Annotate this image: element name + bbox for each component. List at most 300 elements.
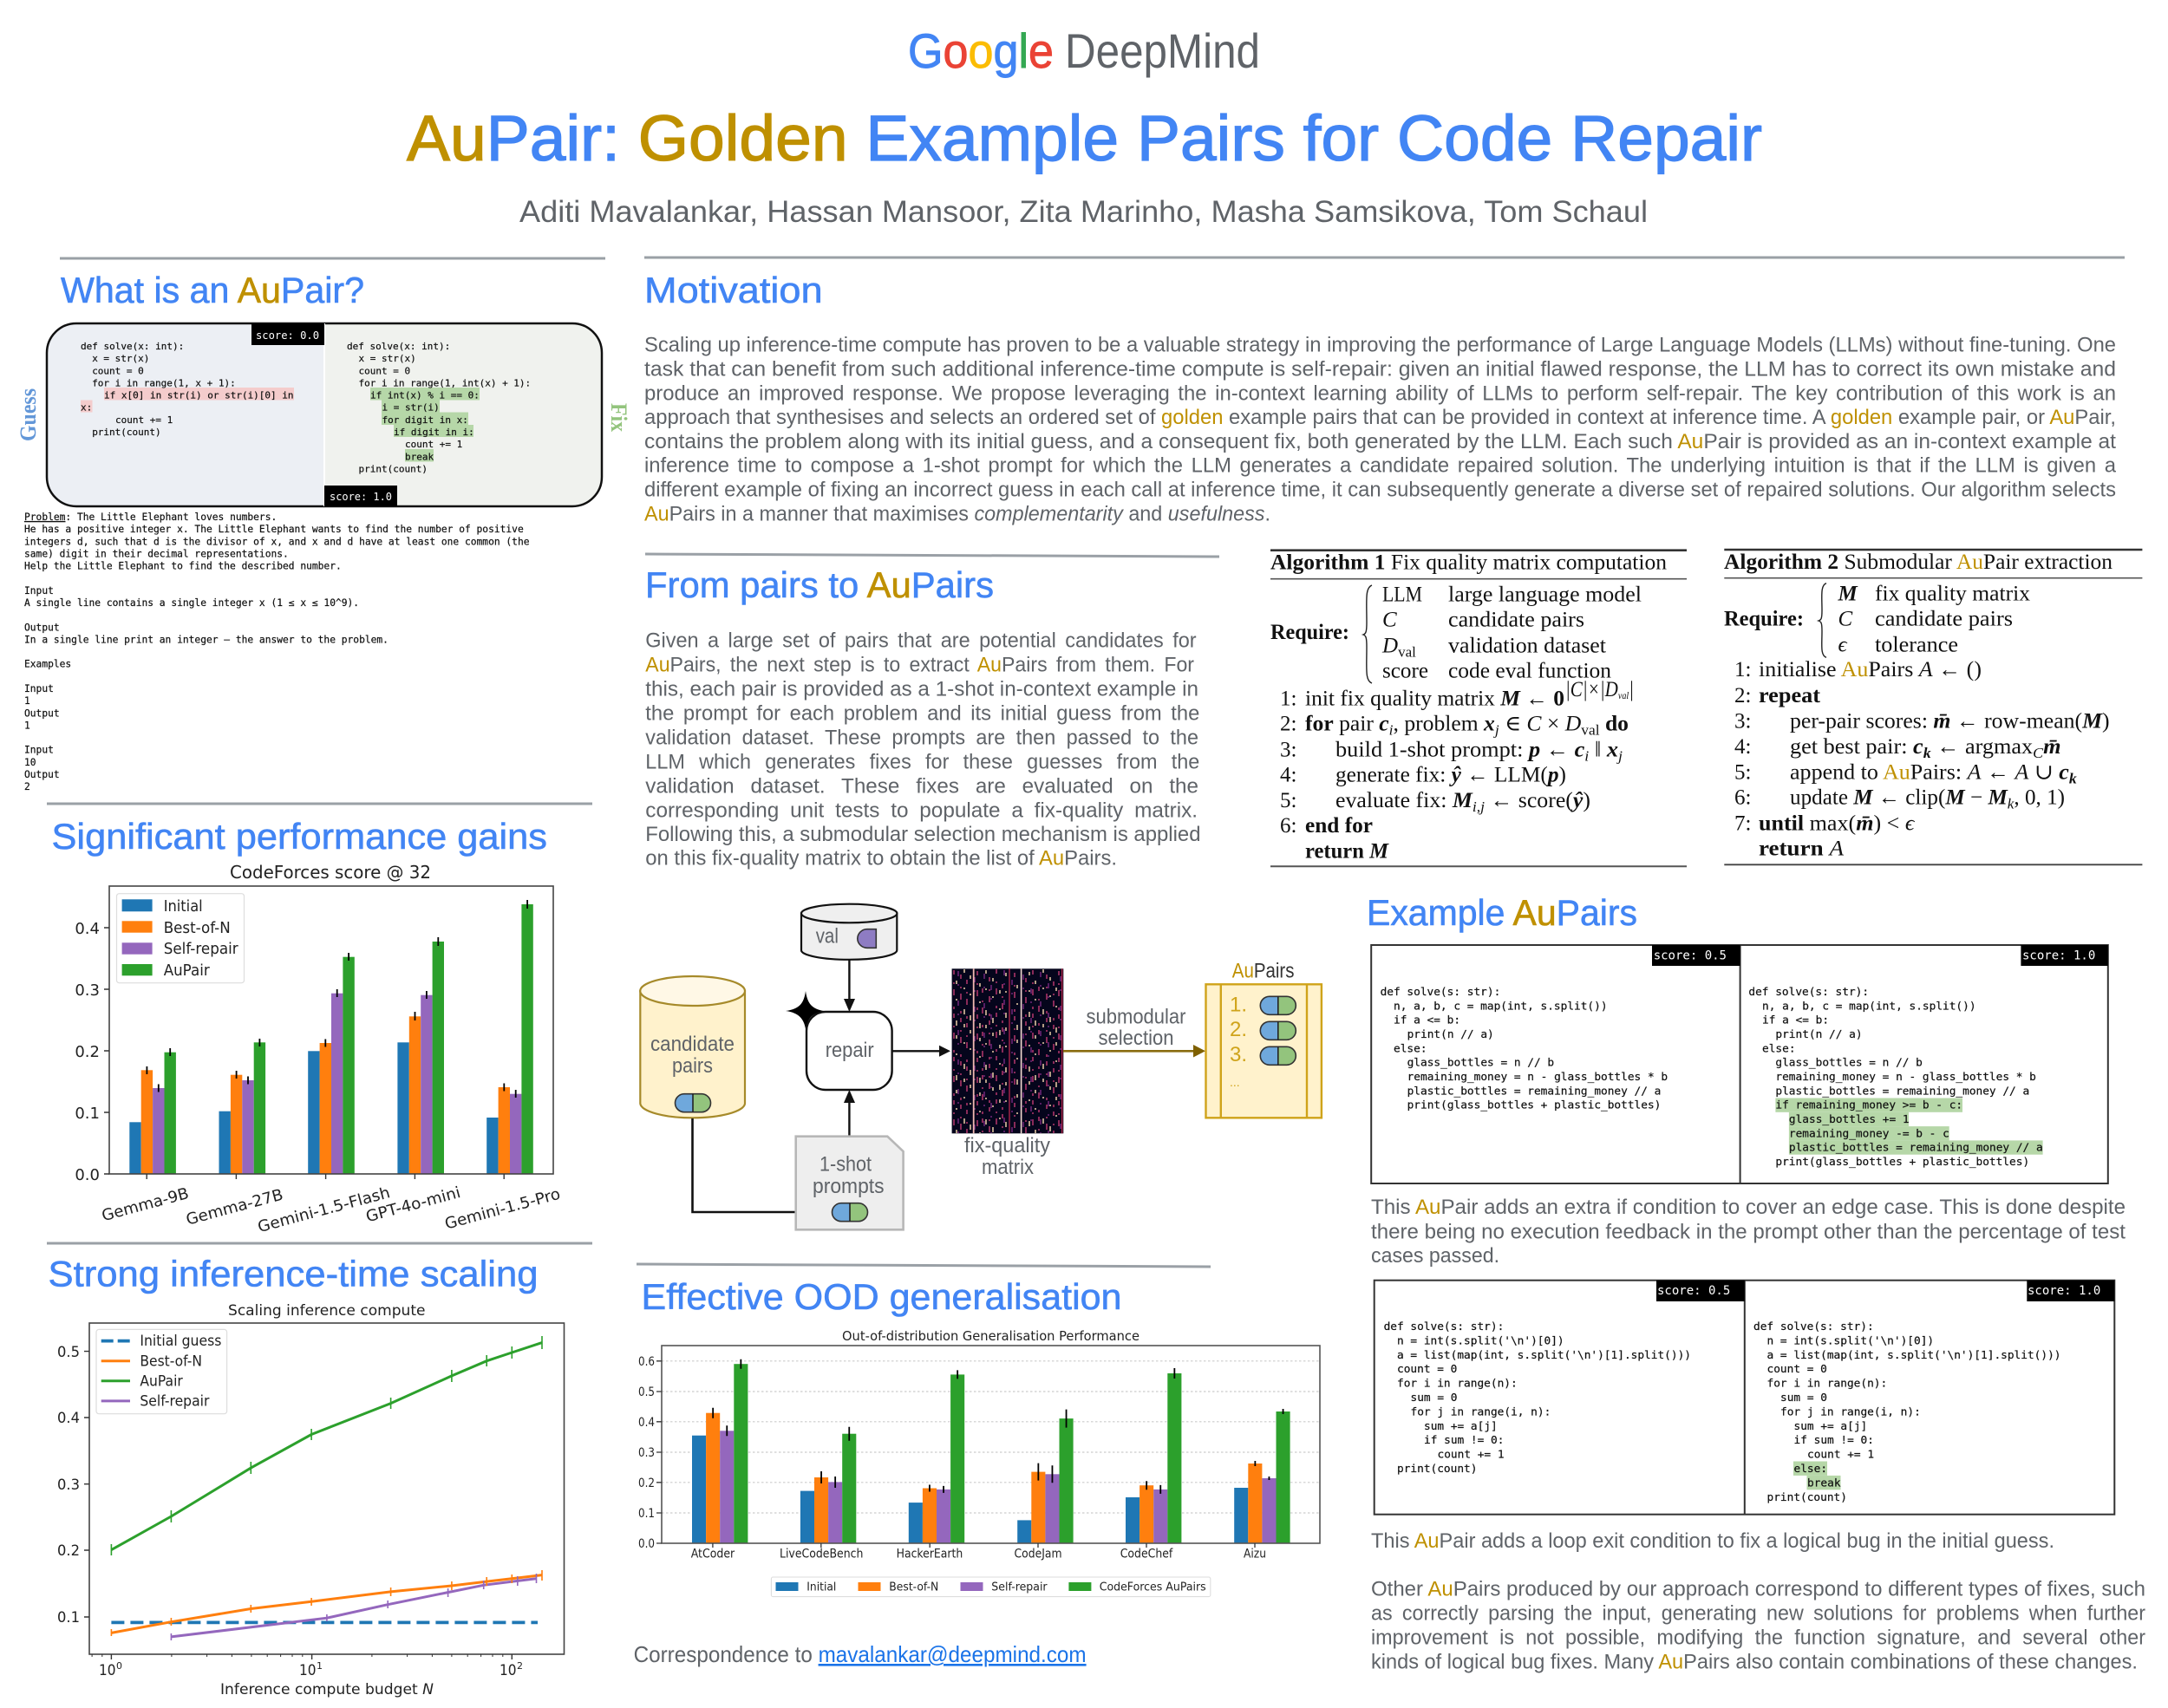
text block: problem statement: Output xyxy=(24,769,60,780)
code: guess: def solve(s: str): xyxy=(1381,986,1500,999)
text block: from pairs to AuPairs: validation dataset. These prompts are then passed to the xyxy=(645,727,1198,750)
algorithm 1: fix quality matrix computation: val xyxy=(1398,644,1416,661)
algorithm 2: submodular AuPair extraction: 2: xyxy=(1734,684,1751,707)
code: fix: def solve(x: int): xyxy=(347,341,450,352)
bar chart: out-of-distribution generalisation: 0.6 xyxy=(638,1355,655,1369)
text block: problem statement: Input xyxy=(24,585,54,596)
text block: problem statement: In a single line print an integer — the answer to the problem. xyxy=(24,634,389,645)
code: guess: if a <= b: xyxy=(1394,1014,1460,1027)
label: score 0.0: score: 0.0 xyxy=(256,329,319,342)
bar chart: out-of-distribution generalisation: 0.1 xyxy=(638,1507,655,1521)
list: AuPairs: 3. xyxy=(1230,1043,1247,1066)
code: guess: remaining_money = n - glass_bottles * b xyxy=(1407,1071,1668,1084)
text block: problem statement: Output xyxy=(24,622,60,633)
label: score 1.0 xyxy=(2021,945,2108,966)
algorithm 2: submodular AuPair extraction: k xyxy=(2008,796,2015,812)
algorithm 2: submodular AuPair extraction: Require: xyxy=(1724,608,1804,631)
algorithm 2: submodular AuPair extraction: m̄ xyxy=(2043,735,2060,759)
code: guess: sum += a[j] xyxy=(1424,1420,1498,1433)
bar chart: CodeForces score @ 32: CodeForces score @ 32 xyxy=(230,862,431,883)
code: initial guess: if x[0] in str(i) or str(i)[0] in xyxy=(104,390,294,401)
text block: problem statement: He has a positive integer x. The Little Elephant wants to find the number of positive xyxy=(24,524,524,535)
code: initial guess: count += 1 xyxy=(115,414,173,426)
logo: Google DeepMind: Google xyxy=(908,23,1054,78)
caption: example 1: This AuPair adds an extra if condition to cover an edge case. This is done despite xyxy=(1371,1196,2126,1219)
bar chart: out-of-distribution generalisation: 0.0 xyxy=(638,1537,655,1551)
algorithm 2: submodular AuPair extraction: ← argmax xyxy=(1931,735,2034,759)
code: initial guess: for i in range(1, x + 1): xyxy=(92,377,236,388)
arrow: submodular selection: submodular xyxy=(1086,1006,1186,1029)
code: guess: print(count) xyxy=(1397,1463,1477,1476)
bar chart: out-of-distribution generalisation: Out-of-distribution Generalisation Performance xyxy=(842,1328,1140,1344)
code: fix: else: xyxy=(1762,1042,1796,1055)
label: score 1.0 xyxy=(2027,1281,2114,1301)
legend xyxy=(771,1577,1211,1597)
code: initial guess: count = 0 xyxy=(92,365,144,376)
heading: Significant performance gains: Significant performance gains xyxy=(52,816,547,857)
cylinder: val xyxy=(801,904,897,960)
text block: motivation: task that can benefit from such additional inference-time compute is self-repair: given an initial flawed response, the LLM has to correct its own mistake and xyxy=(644,357,2116,381)
code: guess: for j in range(i, n): xyxy=(1410,1405,1551,1418)
text block: problem statement: 1 xyxy=(24,720,30,731)
legend: Initial xyxy=(806,1580,836,1594)
label: score 1.0: score: 1.0 xyxy=(2022,949,2095,963)
code: guess: print(n // a) xyxy=(1407,1028,1494,1041)
code: initial guess: print(count) xyxy=(92,427,161,438)
algorithm 2: submodular AuPair extraction: ϵ xyxy=(1838,634,1847,657)
algorithm 1: fix quality matrix computation: , problem xyxy=(1394,713,1484,736)
code: guess: glass_bottles = n // b xyxy=(1407,1057,1554,1070)
code: guess: n, a, b, c = map(int, s.split()) xyxy=(1394,1000,1608,1013)
list: AuPairs: ... xyxy=(1230,1075,1240,1089)
code: guess: sum = 0 xyxy=(1410,1392,1457,1405)
heading: What is an AuPair?: What is an AuPair? xyxy=(61,270,364,310)
arrow: submodular selection: selection xyxy=(1098,1027,1174,1050)
code: fix: n = int(s.split('\n')[0]) xyxy=(1767,1334,1934,1347)
code: fix: plastic_bottles = remaining_money // a xyxy=(1775,1085,2029,1098)
legend: Best-of-N xyxy=(889,1580,938,1594)
code: fix: sum = 0 xyxy=(1780,1392,1827,1405)
list: AuPairs: 2. xyxy=(1230,1018,1247,1041)
cylinder: candidate pairs: pairs xyxy=(672,1054,713,1078)
algorithm 2: submodular AuPair extraction: C xyxy=(2033,745,2044,761)
algorithm 2: submodular AuPair extraction: update M ← clip(M − M xyxy=(1790,786,2008,810)
algorithm 2: submodular AuPair extraction: get best pair: c xyxy=(1790,735,1923,759)
line chart: Scaling inference compute: 2 xyxy=(517,1660,523,1672)
algorithm 2: submodular AuPair extraction: k xyxy=(1923,745,1931,761)
cylinder: candidate pairs: candidate xyxy=(650,1033,735,1056)
text block: problem statement: Output xyxy=(24,707,60,719)
algorithm 1: fix quality matrix computation: 1: xyxy=(1280,687,1296,710)
code: initial guess: def solve(x: int): xyxy=(81,341,184,352)
bar chart: out-of-distribution generalisation: HackerEarth xyxy=(897,1548,963,1561)
arrow: repair to matrix xyxy=(892,1046,950,1057)
bar chart: CodeForces score @ 32: Gemma-9B xyxy=(100,1184,191,1225)
code: fix: a = list(map(int, s.split('\n')[1].split())) xyxy=(1767,1349,2060,1362)
text block: motivation xyxy=(644,334,2117,525)
text block: from pairs to AuPairs xyxy=(645,629,1200,870)
text block: other AuPairs: kinds of logical bug fixes. Many AuPairs also contain combinations of these changes. xyxy=(1371,1650,2138,1673)
legend: CodeForces AuPairs xyxy=(1100,1580,1206,1594)
algorithm 2: submodular AuPair extraction: 3: xyxy=(1734,709,1751,733)
line chart: Scaling inference compute: 0 xyxy=(116,1660,122,1672)
algorithm 1: fix quality matrix computation: ∈ xyxy=(1499,713,1526,736)
algorithm 2: submodular AuPair extraction: , 0, 1) xyxy=(2014,786,2065,810)
list: AuPairs: 1. xyxy=(1230,994,1247,1017)
code: guess: count = 0 xyxy=(1397,1363,1457,1376)
code: fix: for i in range(n): xyxy=(1767,1378,1887,1391)
algorithm 1: fix quality matrix computation: ← score( xyxy=(1485,789,1573,812)
code: fix: print(count) xyxy=(359,463,428,474)
code: fix: plastic_bottles = remaining_money // a xyxy=(1789,1142,2043,1155)
code: fix: for digit in x: xyxy=(382,414,468,426)
algorithm 1: fix quality matrix computation: return M xyxy=(1305,839,1389,863)
list: AuPairs: AuPairs xyxy=(1232,959,1295,982)
algorithm 1: fix quality matrix computation: score xyxy=(1382,660,1428,683)
code: fix: x = str(x) xyxy=(359,353,416,364)
algorithm 1: fix quality matrix computation: 3: xyxy=(1280,738,1296,761)
bar chart: CodeForces score @ 32: Gemini-1.5-Flash xyxy=(256,1183,392,1236)
code: fix: sum += a[j] xyxy=(1793,1420,1867,1433)
code: guess: n = int(s.split('\n')[0]) xyxy=(1397,1334,1564,1347)
code: fix: remaining_money -= b - c xyxy=(1789,1127,1949,1140)
algorithm 1: fix quality matrix computation: x xyxy=(1483,713,1495,736)
legend: Best-of-N xyxy=(164,919,231,937)
algorithm 1: fix quality matrix computation: i xyxy=(1389,722,1394,739)
text: correspondence: Correspondence to mavalankar@deepmind.com xyxy=(634,1641,1087,1667)
legend: AuPair xyxy=(140,1373,183,1391)
algorithm 1: fix quality matrix computation: Require: xyxy=(1270,621,1349,644)
algorithm 1: fix quality matrix computation: C × D xyxy=(1526,713,1581,736)
heading: Effective OOD generalisation: Effective OOD generalisation xyxy=(642,1276,1122,1317)
text block: from pairs to AuPairs: this, each pair is provided as a 1-shot in-context example in xyxy=(645,678,1198,701)
code: fix: break xyxy=(405,451,434,462)
label: score 1.0 xyxy=(324,486,397,506)
code: guess: plastic_bottles = remaining_money // a xyxy=(1407,1085,1661,1098)
authors: Aditi Mavalankar, Hassan Mansoor, Zita Marinho, Masha Samsikova, Tom Schaul xyxy=(519,195,1648,229)
algorithm 1: fix quality matrix computation: do xyxy=(1600,713,1629,736)
algorithm 1: fix quality matrix computation: Algorithm 1 Fix quality matrix computation xyxy=(1270,551,1667,575)
text block: other AuPairs: as correctly parsing the input, generating new solutions for problems when further xyxy=(1371,1602,2145,1626)
code: fix xyxy=(1748,986,2043,1169)
text block: from pairs to AuPairs: LLM which generates fixes for these guesses from the xyxy=(645,751,1199,774)
title: AuPair: Golden Example Pairs for Code Repair xyxy=(407,102,1762,174)
algorithm 2: submodular AuPair extraction: 1: xyxy=(1734,658,1751,681)
line chart: Scaling inference compute: 0.2 xyxy=(57,1542,80,1560)
text block: motivation: approach that synthesises and selects an ordered set of golden example pairs that can be provided in context at inference time. A golden example pair, or AuPair, xyxy=(644,406,2116,429)
label: Fix: Fix xyxy=(606,403,631,432)
algorithm 2: submodular AuPair extraction: 7: xyxy=(1734,812,1751,835)
algorithm 2: submodular AuPair extraction: 4: xyxy=(1734,735,1751,759)
label: score 0.0 xyxy=(251,323,324,345)
algorithm 2: submodular AuPair extraction xyxy=(1724,550,2142,864)
line chart: Scaling inference compute: 10 xyxy=(500,1662,517,1679)
bar chart: CodeForces score @ 32: 0.1 xyxy=(75,1105,100,1123)
algorithm 2: submodular AuPair extraction: fix quality matrix xyxy=(1875,583,2031,606)
code: fix: for j in range(i, n): xyxy=(1780,1405,1921,1418)
algorithm 1: fix quality matrix computation: i,j xyxy=(1473,799,1485,815)
algorithm 1: fix quality matrix computation: ŷ) xyxy=(1573,789,1590,812)
bar chart: CodeForces score @ 32: 0.3 xyxy=(75,981,100,1000)
algorithm 1: fix quality matrix computation: i xyxy=(1584,747,1590,764)
arrow: candidates to prompts xyxy=(692,1118,833,1217)
algorithm 2: submodular AuPair extraction: append to AuPairs: A ← A ∪ c xyxy=(1790,760,2068,784)
algorithm 1: fix quality matrix computation: large language model xyxy=(1448,583,1642,606)
algorithm 1: fix quality matrix computation: 6: xyxy=(1280,814,1296,838)
algorithm 1: fix quality matrix computation xyxy=(1270,551,1687,866)
code: initial guess xyxy=(81,341,294,438)
bar chart: out-of-distribution generalisation: 0.3 xyxy=(638,1446,655,1460)
bar chart: out-of-distribution generalisation: 0.4 xyxy=(638,1416,655,1430)
algorithm 2: submodular AuPair extraction: per-pair scores: m̄ ← row-mean(M) xyxy=(1790,709,2110,733)
text block: motivation: AuPairs in a manner that maximises complementarity and usefulness. xyxy=(644,502,1270,525)
bar chart: out-of-distribution generalisation: AtCoder xyxy=(691,1548,735,1561)
code: fix: break xyxy=(1807,1477,1841,1490)
code: fix xyxy=(347,341,531,474)
text block: other AuPairs: Other AuPairs produced by our approach correspond to different types of fixes, such xyxy=(1371,1578,2145,1601)
algorithm 1: fix quality matrix computation: |C|×|D xyxy=(1565,678,1628,701)
legend: Best-of-N xyxy=(140,1353,202,1370)
algorithm 1: fix quality matrix computation: for pair c xyxy=(1305,713,1388,736)
algorithm 2: submodular AuPair extraction: Algorithm 2 Submodular AuPair extraction xyxy=(1724,551,2112,574)
bar chart: CodeForces score @ 32: Gemma-27B xyxy=(184,1186,285,1229)
bar chart: out-of-distribution generalisation: LiveCodeBench xyxy=(780,1548,863,1561)
text block: motivation: contains the problem along with its initial guess, and a consequent fix, both generated by the LLM. Each such AuPair is provided as an in-context example at xyxy=(644,430,2116,453)
arrow: prompts to repair xyxy=(844,1090,855,1137)
algorithm 2: submodular AuPair extraction: repeat xyxy=(1759,684,1821,707)
label: score 0.5 xyxy=(1652,945,1740,966)
cylinder: candidate pairs xyxy=(640,976,745,1118)
line chart: Scaling inference compute: 0.5 xyxy=(57,1344,80,1361)
code: fix: print(glass_bottles + plastic_bottles) xyxy=(1775,1156,2029,1169)
code: guess: if sum != 0: xyxy=(1424,1434,1504,1447)
heatmap: fix-quality matrix: matrix xyxy=(982,1156,1034,1179)
code: fix: def solve(s: str): xyxy=(1753,1320,1874,1333)
heading: Example AuPairs: Example AuPairs xyxy=(1367,892,1637,933)
heatmap: fix-quality matrix: fix-quality xyxy=(964,1134,1050,1157)
algorithm 1: fix quality matrix computation: init fix quality matrix M ← 0 xyxy=(1305,687,1564,710)
panel: example pair 1 xyxy=(1371,945,2108,1183)
code: initial guess: x = str(x) xyxy=(92,353,149,364)
arrow: val to repair xyxy=(844,960,855,1012)
legend: Self-repair xyxy=(164,940,238,958)
algorithm 1: fix quality matrix computation: validation dataset xyxy=(1448,635,1606,658)
line chart: Scaling inference compute: 0.1 xyxy=(57,1609,80,1627)
code: fix: count += 1 xyxy=(405,439,462,450)
caption: example 1: cases passed. xyxy=(1371,1244,1499,1268)
cylinder: val: val xyxy=(816,925,839,949)
algorithm 2: submodular AuPair extraction: C xyxy=(1838,608,1852,631)
line chart: Scaling inference compute: Scaling inference compute xyxy=(228,1302,425,1320)
algorithm 1: fix quality matrix computation: C xyxy=(1382,609,1397,632)
code: guess: def solve(s: str): xyxy=(1384,1320,1504,1333)
code: fix: print(n // a) xyxy=(1775,1028,1863,1041)
text block: from pairs to AuPairs: corresponding unit tests to populate a fix-quality matrix. xyxy=(645,799,1198,822)
algorithm 1: fix quality matrix computation: j xyxy=(1616,747,1623,764)
code: fix: print(count) xyxy=(1767,1491,1847,1504)
algorithm 1: fix quality matrix computation: j xyxy=(1493,722,1499,739)
algorithm 2: submodular AuPair extraction: tolerance xyxy=(1875,634,1958,657)
text block: from pairs to AuPairs: on this fix-quality matrix to obtain the list of AuPairs. xyxy=(645,847,1117,870)
code: fix xyxy=(1753,1320,2060,1504)
bar chart: CodeForces score @ 32: 0.2 xyxy=(75,1043,100,1061)
text block: from pairs to AuPairs: AuPairs, the next step is to extract AuPairs from them. For xyxy=(645,654,1194,677)
bar chart: CodeForces score @ 32 xyxy=(75,862,562,1236)
bar chart: CodeForces score @ 32: Gemini-1.5-Pro xyxy=(443,1185,562,1234)
code: fix: if remaining_money >= b - c: xyxy=(1775,1099,1962,1112)
algorithm 1: fix quality matrix computation: code eval function xyxy=(1448,660,1611,683)
diagram: AuPair extraction pipeline xyxy=(640,904,1322,1229)
legend: Initial guess xyxy=(140,1333,222,1350)
label: score 1.0: score: 1.0 xyxy=(330,491,392,503)
algorithm 2: submodular AuPair extraction: return A xyxy=(1759,838,1845,861)
text block: problem statement: Problem xyxy=(24,512,66,523)
algorithm 2: submodular AuPair extraction: 6: xyxy=(1734,786,1751,810)
algorithm 1: fix quality matrix computation: candidate pairs xyxy=(1448,609,1584,632)
bar chart: CodeForces score @ 32: GPT-4o-mini xyxy=(364,1183,462,1226)
legend: Self-repair xyxy=(991,1580,1048,1594)
bar chart: out-of-distribution generalisation: CodeJam xyxy=(1015,1548,1061,1561)
code: initial guess: x: xyxy=(81,402,92,414)
text block: motivation: produce an improved response. We propose leveraging the in-context learning ability of LLMs to perform self-repair. The key contribution of this work is an xyxy=(644,381,2116,405)
algorithm 1: fix quality matrix computation: | xyxy=(1629,678,1634,701)
code: fix: glass_bottles = n // b xyxy=(1775,1057,1923,1070)
algorithm 2: submodular AuPair extraction: M xyxy=(1837,583,1858,606)
document: 1-shot prompts: 1-shot xyxy=(820,1153,872,1177)
heading: Motivation: Motivation xyxy=(644,270,823,310)
list: AuPairs xyxy=(1205,959,1322,1118)
algorithm 1: fix quality matrix computation: end for xyxy=(1305,814,1373,838)
bar chart: CodeForces score @ 32: 0.0 xyxy=(75,1166,100,1184)
algorithm 2: submodular AuPair extraction: until max(m̄) < ϵ xyxy=(1759,812,1915,835)
bar chart: out-of-distribution generalisation: 0.5 xyxy=(638,1385,655,1399)
caption: example 2: This AuPair adds a loop exit condition to fix a logical bug in the initial guess. xyxy=(1371,1529,2054,1553)
code: fix: count = 0 xyxy=(1767,1363,1827,1376)
algorithm 2: submodular AuPair extraction: initialise AuPairs A ← () xyxy=(1759,658,1982,681)
code: fix: remaining_money = n - glass_bottles * b xyxy=(1775,1071,2036,1084)
box: repair: repair xyxy=(826,1039,874,1062)
bar chart: out-of-distribution generalisation xyxy=(638,1328,1320,1597)
caption: example 1 xyxy=(1371,1196,2126,1268)
bar chart: out-of-distribution generalisation: Aizu xyxy=(1244,1548,1266,1561)
code: fix: if digit in i: xyxy=(394,427,474,438)
text block: other AuPairs: improvement is not possible, modifying the function signature, and several other xyxy=(1371,1627,2145,1650)
code: guess: for i in range(n): xyxy=(1397,1378,1518,1391)
algorithm 1: fix quality matrix computation: evaluate fix: M xyxy=(1335,789,1472,812)
text block: from pairs to AuPairs: Following this, a submodular selection mechanism is applied xyxy=(645,823,1200,846)
text block: from pairs to AuPairs: validation dataset. These fixes are evaluated on the xyxy=(645,774,1198,798)
logo: Google DeepMind: DeepMind xyxy=(1065,23,1260,78)
code: fix: glass_bottles += 1 xyxy=(1789,1113,1910,1126)
legend xyxy=(96,1329,227,1414)
algorithm 2: submodular AuPair extraction: 5: xyxy=(1734,760,1751,784)
code: fix: count = 0 xyxy=(359,365,410,376)
logo: Google DeepMind xyxy=(908,23,1260,78)
bar chart: out-of-distribution generalisation: 0.2 xyxy=(638,1477,655,1490)
code: fix: for i in range(1, int(x) + 1): xyxy=(359,377,531,388)
text block: problem statement: Input xyxy=(24,745,54,756)
text block: from pairs to AuPairs: Given a large set of pairs that are potential candidates for xyxy=(645,629,1197,653)
code: fix: else: xyxy=(1793,1463,1827,1476)
text block: problem statement: : The Little Elephant loves numbers. xyxy=(65,512,277,523)
code: fix: if int(x) % i == 0: xyxy=(370,390,480,401)
code: fix: count += 1 xyxy=(1807,1449,1874,1462)
label: score 0.5: score: 0.5 xyxy=(1654,949,1727,963)
algorithm 1: fix quality matrix computation: LLM xyxy=(1382,583,1422,606)
box: repair xyxy=(806,1012,892,1090)
bar chart: CodeForces score @ 32: 0.4 xyxy=(75,920,100,938)
line chart: Scaling inference compute: 0.4 xyxy=(57,1410,80,1427)
text block: problem statement: 10 xyxy=(24,757,36,768)
arrow: submodular selection xyxy=(1063,1006,1205,1058)
legend: AuPair xyxy=(164,962,210,980)
heatmap: fix-quality matrix xyxy=(952,968,1063,1179)
algorithm 1: fix quality matrix computation: val xyxy=(1581,722,1600,739)
legend xyxy=(116,894,245,983)
algorithm 1: fix quality matrix computation: generate fix: ŷ ← LLM(p) xyxy=(1335,764,1566,787)
algorithm 1: fix quality matrix computation: build 1-shot prompt: p ← c xyxy=(1335,738,1584,761)
algorithm 2: submodular AuPair extraction: candidate pairs xyxy=(1875,608,2013,631)
algorithm 1: fix quality matrix computation: val xyxy=(1618,689,1629,701)
algorithm 1: fix quality matrix computation: 4: xyxy=(1280,764,1296,787)
algorithm 1: fix quality matrix computation: 5: xyxy=(1280,789,1296,812)
text block: problem statement: 2 xyxy=(24,781,30,792)
line chart: Scaling inference compute: 10 xyxy=(99,1662,116,1679)
line chart: Scaling inference compute: 1 xyxy=(317,1660,323,1672)
heading: From pairs to AuPairs: From pairs to AuPairs xyxy=(645,564,994,605)
code: fix: n, a, b, c = map(int, s.split()) xyxy=(1762,1000,1976,1013)
line chart: Scaling inference compute: 0.3 xyxy=(57,1477,80,1494)
line chart: Scaling inference compute xyxy=(57,1302,564,1698)
text block: problem statement: Examples xyxy=(24,659,71,670)
label: score 0.5: score: 0.5 xyxy=(1657,1284,1730,1298)
text block: from pairs to AuPairs: the prompt for each problem and its initial guess from the xyxy=(645,702,1199,726)
legend: Initial xyxy=(164,897,203,916)
algorithm 1: fix quality matrix computation: x xyxy=(1606,738,1618,761)
code: guess: a = list(map(int, s.split('\n')[1].split())) xyxy=(1397,1349,1691,1362)
caption: example 1: there being no execution feedback in the prompt other than the percentage of test xyxy=(1371,1220,2126,1243)
legend: Self-repair xyxy=(140,1392,209,1410)
algorithm 1: fix quality matrix computation: 2: xyxy=(1280,713,1296,736)
label: score 1.0: score: 1.0 xyxy=(2028,1284,2100,1298)
line chart: Scaling inference compute: 10 xyxy=(299,1662,316,1679)
text block: problem statement: A single line contains a single integer x (1 ≤ x ≤ 10^9). xyxy=(24,597,359,609)
bar chart: out-of-distribution generalisation: CodeChef xyxy=(1120,1548,1173,1561)
document: 1-shot prompts xyxy=(796,1137,904,1229)
line chart: Scaling inference compute: Inference compute budget N xyxy=(220,1681,434,1698)
code: fix: def solve(s: str): xyxy=(1748,986,1869,999)
text block: problem statement: 1 xyxy=(24,695,30,707)
code: fix: if a <= b: xyxy=(1762,1014,1829,1027)
icon: sparkle xyxy=(786,991,824,1029)
heading: Strong inference-time scaling: Strong inference-time scaling xyxy=(49,1254,538,1294)
text block: motivation: Scaling up inference-time compute has proven to be a valuable strategy in improving the performance of Large Language Models (LLMs) without fine-tuning. One xyxy=(644,334,2116,357)
code: fix: i = str(i) xyxy=(382,402,440,414)
label: Guess: Guess xyxy=(16,388,41,441)
text block: problem statement: Input xyxy=(24,683,54,694)
text block: other AuPairs xyxy=(1371,1578,2145,1673)
text block: motivation: different example of fixing an incorrect guess in each call at inference time, it can subsequently generate a diverse set of repaired solutions. Our algorithm selects xyxy=(644,479,2116,502)
algorithm 1: fix quality matrix computation: D xyxy=(1381,635,1398,658)
panel: example pair 2 xyxy=(1375,1281,2114,1515)
text block: problem statement: same) digit in their decimal representations. xyxy=(24,548,289,559)
code: fix: if sum != 0: xyxy=(1793,1434,1874,1447)
text block: problem statement: integers d, such that d is the divisor of x, and x and d have at least one common (the xyxy=(24,536,530,547)
code: guess: print(glass_bottles + plastic_bottles) xyxy=(1407,1099,1661,1112)
panel: guess and fix code example xyxy=(47,323,602,506)
label: score 0.5 xyxy=(1656,1281,1745,1301)
text block: problem statement: Help the Little Elephant to find the described number. xyxy=(24,560,342,572)
